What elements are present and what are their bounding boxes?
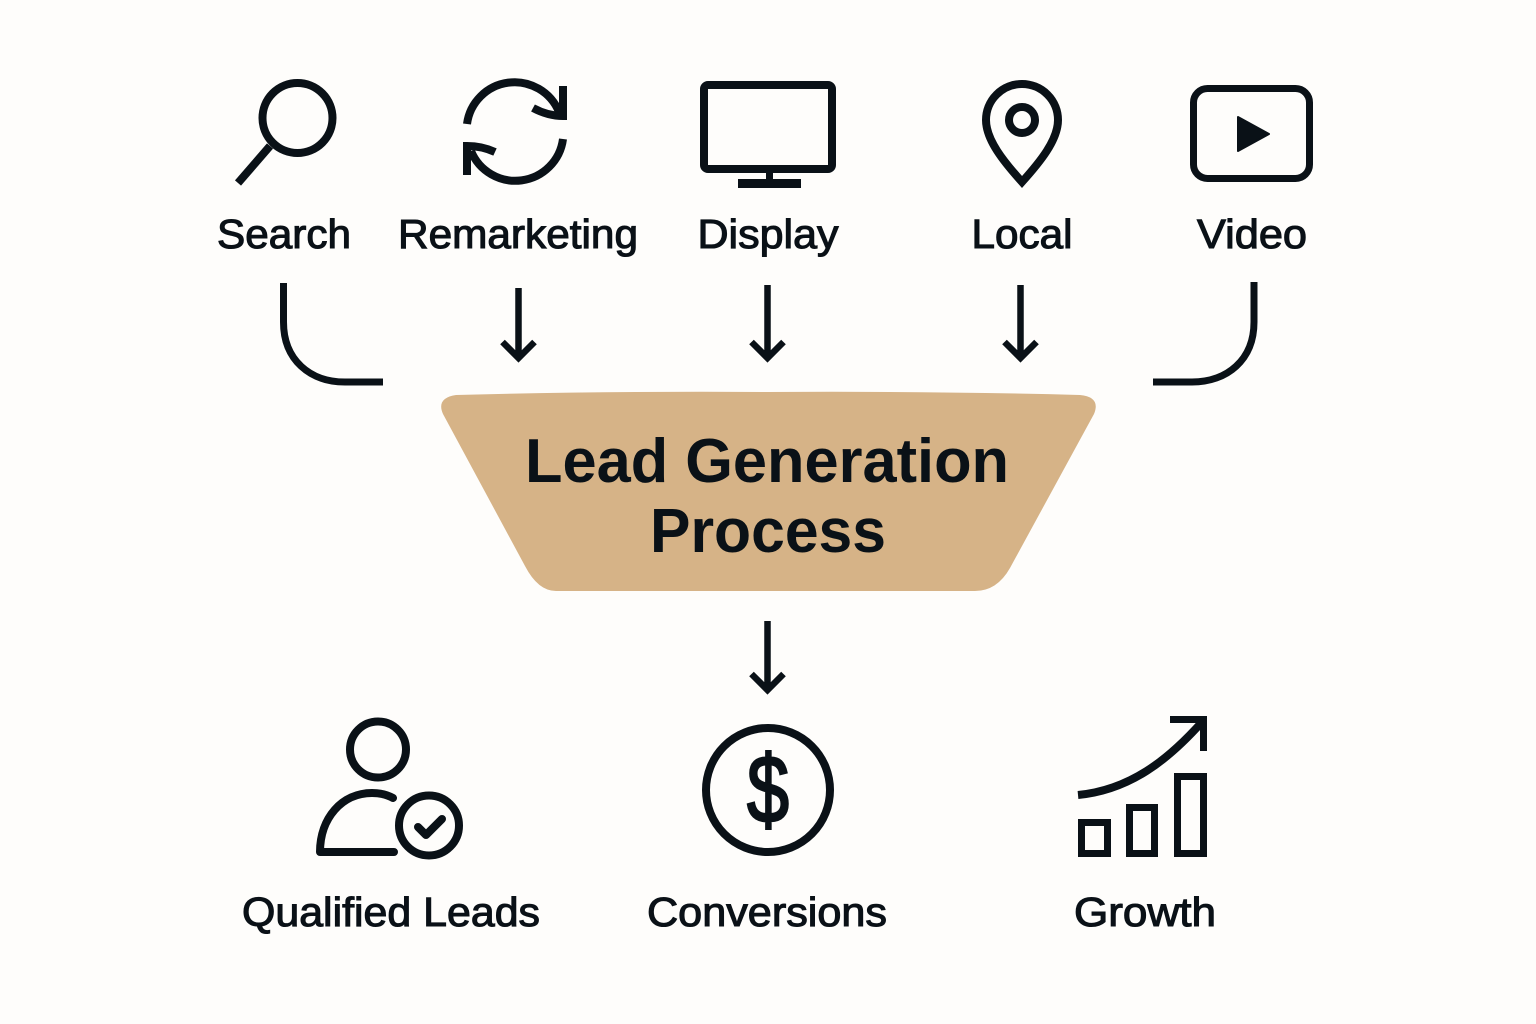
arrow: display to funnel [752, 285, 784, 358]
arrow: remarketing to funnel [502, 288, 534, 358]
icon: growth [1078, 720, 1204, 854]
icon: search [238, 83, 332, 183]
icon: local pin [986, 84, 1058, 182]
icon: conversions [706, 728, 830, 852]
arrow: video to funnel [1153, 282, 1254, 382]
label: Growth: Growth [1074, 889, 1216, 935]
label: Video: Video [1197, 211, 1307, 257]
funnel subtitle: Process [650, 497, 886, 566]
icon: remarketing [467, 82, 563, 181]
label: Display: Display [698, 211, 839, 257]
arrow: search to funnel [284, 283, 383, 382]
label: Local: Local [972, 211, 1072, 257]
arrow: local to funnel [1004, 285, 1036, 358]
icon: display [704, 85, 832, 184]
icon: conversions: $ [747, 736, 789, 843]
label: Remarketing: Remarketing [398, 211, 638, 257]
label: Conversions: Conversions [647, 889, 887, 935]
arrow: funnel to outcomes [752, 621, 784, 690]
label: Search: Search [217, 211, 351, 257]
label: Qualified Leads: Qualified Leads [242, 889, 540, 935]
funnel: lead generation process [441, 392, 1096, 591]
icon: video [1194, 88, 1310, 178]
icon: qualified leads [320, 722, 459, 856]
funnel title: Lead Generation [525, 427, 1009, 496]
